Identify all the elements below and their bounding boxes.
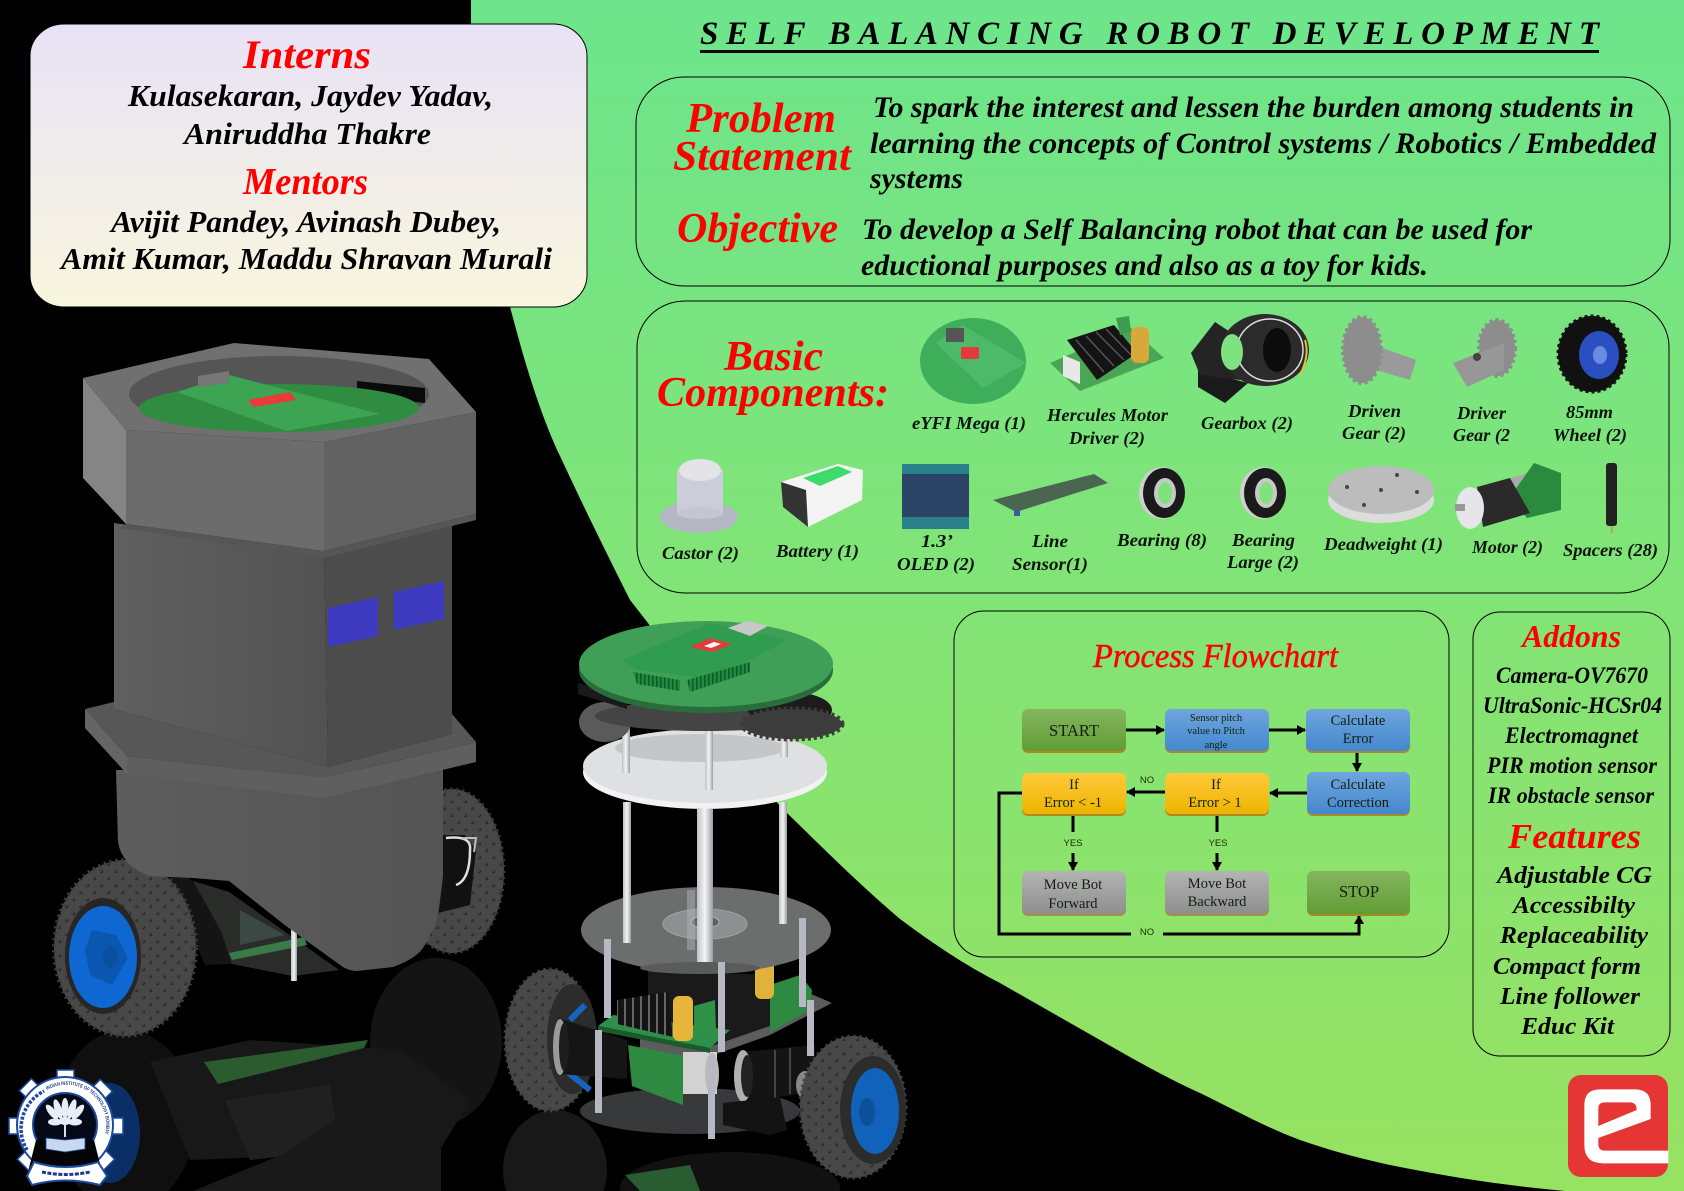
top green disc xyxy=(579,621,833,713)
step: move bot forward: Forward xyxy=(1048,896,1098,912)
label: wheel: 85mm xyxy=(1566,402,1613,422)
under chassis xyxy=(160,860,339,981)
branch labels: NO xyxy=(1140,775,1154,786)
addons list: Camera-OV7670 xyxy=(1496,663,1648,688)
objective text: To develop a Self Balancing robot that can be used for xyxy=(862,213,1532,246)
icon: driven gear xyxy=(1343,317,1416,383)
label: line sensor: Sensor(1) xyxy=(1012,554,1088,575)
icon: spacer xyxy=(1606,463,1617,533)
book xyxy=(46,1138,85,1152)
panel: addons and features xyxy=(1473,612,1670,1056)
decision: error less than -1 xyxy=(1022,773,1126,816)
heading: basic components: Basic xyxy=(723,334,823,380)
panel: basic components xyxy=(637,301,1669,593)
reflection of small robot xyxy=(503,1110,840,1191)
panel: problem statement and objective xyxy=(636,77,1670,286)
icon: deadweight xyxy=(1328,466,1434,523)
branch labels: YES xyxy=(1208,838,1228,849)
label: driven gear xyxy=(1342,401,1406,444)
label: eYFI Mega: eYFI Mega (1) xyxy=(912,413,1026,434)
step: move bot forward xyxy=(1022,871,1126,916)
label: bearing: Bearing (8) xyxy=(1116,530,1207,551)
heading: interns: Interns xyxy=(242,32,371,77)
open bottom of ring xyxy=(28,1140,102,1172)
features list: Replaceability xyxy=(1499,923,1648,949)
long white rods xyxy=(623,802,787,962)
label: wheel xyxy=(1553,402,1627,446)
top cap xyxy=(83,343,476,558)
heading: objective: Objective xyxy=(677,206,838,252)
label: battery: Battery (1) xyxy=(775,541,859,562)
features list: Accessibilty xyxy=(1511,893,1635,919)
step: move bot forward: Move Bot xyxy=(1044,877,1102,893)
decision: error greater than 1: Error > 1 xyxy=(1188,795,1242,811)
label: castor: Castor (2) xyxy=(662,543,739,564)
label: OLED: 1.3’ xyxy=(921,531,953,551)
rear plate and electronics xyxy=(640,955,832,1060)
decision: error less than -1: Error < -1 xyxy=(1044,795,1102,811)
heading: process flowchart: Process Flowchart xyxy=(1092,638,1339,675)
problem text: learning the concepts of Control systems / Robotics / Embedded xyxy=(870,127,1657,160)
icon: motor xyxy=(1455,463,1561,529)
gear teeth xyxy=(9,1070,123,1171)
label: driven gear: Driven xyxy=(1347,401,1401,421)
branch labels xyxy=(1063,775,1228,938)
panel: process flowchart xyxy=(954,611,1449,957)
label: Hercules motor driver: Hercules Motor xyxy=(1046,405,1169,425)
step: calculate correction xyxy=(1307,772,1410,816)
step: sensor pitch xyxy=(1165,709,1269,753)
icon: wheel xyxy=(1558,316,1626,392)
step: move bot backward xyxy=(1165,871,1269,916)
step: calculate error xyxy=(1306,709,1410,753)
motor driver board xyxy=(598,992,730,1053)
step: calculate correction: Correction xyxy=(1327,795,1390,811)
label: bearing large: Large (2) xyxy=(1226,552,1299,573)
reflection of big robot xyxy=(55,958,502,1191)
label: bearing large xyxy=(1226,530,1299,573)
problem text xyxy=(869,91,1657,195)
heading: problem statement xyxy=(673,96,852,180)
label: OLED: OLED (2) xyxy=(897,554,975,575)
decision: error less than -1: If xyxy=(1069,777,1079,793)
big grey robot xyxy=(54,343,504,1191)
step: stop xyxy=(1307,871,1410,916)
decision: error greater than 1 xyxy=(1165,773,1269,816)
white disc xyxy=(583,729,827,809)
translucent disc xyxy=(581,887,831,974)
black sensor box xyxy=(723,1097,787,1135)
label: driver gear xyxy=(1453,403,1510,446)
step: calculate error: Calculate xyxy=(1331,713,1385,729)
label: bearing large: Bearing xyxy=(1231,530,1295,550)
label: driver gear: Driver xyxy=(1456,403,1507,423)
right motor xyxy=(734,1045,815,1102)
left motor xyxy=(553,1018,627,1079)
lower body xyxy=(116,770,443,971)
label: driven gear: Gear (2) xyxy=(1342,423,1406,444)
label: Hercules motor driver: Driver (2) xyxy=(1068,428,1145,449)
icon: OLED xyxy=(902,464,969,529)
heading: problem statement: Statement xyxy=(673,134,852,180)
label: line sensor xyxy=(1012,531,1088,575)
addons list xyxy=(1483,663,1662,808)
step: sensor pitch: angle xyxy=(1205,740,1228,751)
step: calculate error: Error xyxy=(1343,731,1373,747)
intern names xyxy=(127,78,493,151)
step: calculate correction: Calculate xyxy=(1331,777,1385,793)
right wheel xyxy=(800,1036,906,1178)
decision: error greater than 1: If xyxy=(1211,777,1221,793)
panel: team card xyxy=(30,24,587,307)
bottom chassis disc xyxy=(580,1088,800,1134)
ring text: INDIAN INSTITUTE OF TECHNOLOGY BOMBAY xyxy=(46,1081,110,1135)
addons list: PIR motion sensor xyxy=(1486,753,1658,778)
step: stop: STOP xyxy=(1339,882,1379,901)
step: sensor pitch: value to Pitch xyxy=(1187,726,1246,737)
mentor names: Amit Kumar, Maddu Shravan Murali xyxy=(59,241,552,276)
label: OLED xyxy=(897,531,975,575)
mentor names: Avijit Pandey, Avinash Dubey, xyxy=(109,204,501,239)
addons list: IR obstacle sensor xyxy=(1487,783,1655,808)
connectors xyxy=(999,730,1359,934)
front wheel xyxy=(54,860,196,1036)
step: sensor pitch: Sensor pitch xyxy=(1190,713,1243,724)
features list: Adjustable CG xyxy=(1495,863,1653,889)
lower flange xyxy=(85,702,476,798)
rear wheel xyxy=(400,789,504,953)
addons list: UltraSonic-HCSr04 xyxy=(1483,693,1662,718)
icon: Hercules motor driver xyxy=(1050,316,1164,391)
label: spacers: Spacers (28) xyxy=(1563,540,1658,561)
title: SELF BALANCING ROBOT DEVELOPMENT xyxy=(700,16,1601,52)
heading: features: Features xyxy=(1507,817,1641,856)
intern names: Aniruddha Thakre xyxy=(182,116,431,151)
branch labels: YES xyxy=(1063,838,1083,849)
icon: line sensor xyxy=(993,474,1108,516)
step: move bot backward: Move Bot xyxy=(1188,876,1246,892)
step: start xyxy=(1022,709,1126,753)
features list: Line follower xyxy=(1499,984,1641,1010)
mentor names xyxy=(59,204,552,276)
intern names: Kulasekaran, Jaydev Yadav, xyxy=(127,78,493,113)
small exploded robot xyxy=(503,621,906,1191)
heading: problem statement: Problem xyxy=(685,96,836,142)
icon: castor xyxy=(660,459,738,533)
green bracket and centre xyxy=(628,1045,719,1105)
lotus xyxy=(44,1098,86,1126)
icon: bearing large xyxy=(1240,467,1286,519)
gearbox layer xyxy=(578,683,842,742)
branch labels: NO xyxy=(1140,927,1154,938)
heading: basic components xyxy=(657,334,889,416)
features list xyxy=(1493,863,1653,1040)
upper rods xyxy=(622,709,788,790)
IIT Bombay logo xyxy=(8,1069,140,1186)
motto ribbon xyxy=(27,1162,107,1185)
middle body xyxy=(114,523,452,767)
problem text: To spark the interest and lessen the burden among students in xyxy=(873,91,1634,124)
grey spacers xyxy=(595,890,814,1139)
heading: basic components: Components: xyxy=(657,370,889,416)
step: move bot backward: Backward xyxy=(1188,894,1247,910)
problem text: systems xyxy=(869,162,963,195)
label: line sensor: Line xyxy=(1031,531,1068,551)
objective text xyxy=(861,213,1532,282)
addons list: Electromagnet xyxy=(1504,723,1639,748)
left wheel xyxy=(505,969,597,1111)
objective text: eductional purposes and also as a toy for kids. xyxy=(861,249,1428,282)
label: wheel: Wheel (2) xyxy=(1553,425,1627,446)
features list: Educ Kit xyxy=(1520,1014,1615,1040)
label: motor: Motor (2) xyxy=(1471,537,1543,558)
features list: Compact form xyxy=(1493,954,1641,980)
heading: addons: Addons xyxy=(1520,618,1621,654)
step: start: START xyxy=(1049,721,1099,740)
icon: gearbox xyxy=(1191,314,1309,403)
label: gearbox: Gearbox (2) xyxy=(1201,413,1293,434)
label: Hercules motor driver xyxy=(1046,405,1169,449)
heading: mentors: Mentors xyxy=(242,161,368,203)
icon: battery xyxy=(781,464,863,527)
label: deadweight: Deadweight (1) xyxy=(1323,534,1443,555)
icon: eYFI Mega board xyxy=(920,318,1026,404)
icon: bearing xyxy=(1139,467,1185,519)
blue eyes xyxy=(328,581,444,647)
icon: driver gear xyxy=(1453,320,1515,387)
logo: e-Yantra xyxy=(1568,1075,1668,1177)
label: driver gear: Gear (2 xyxy=(1453,425,1510,446)
